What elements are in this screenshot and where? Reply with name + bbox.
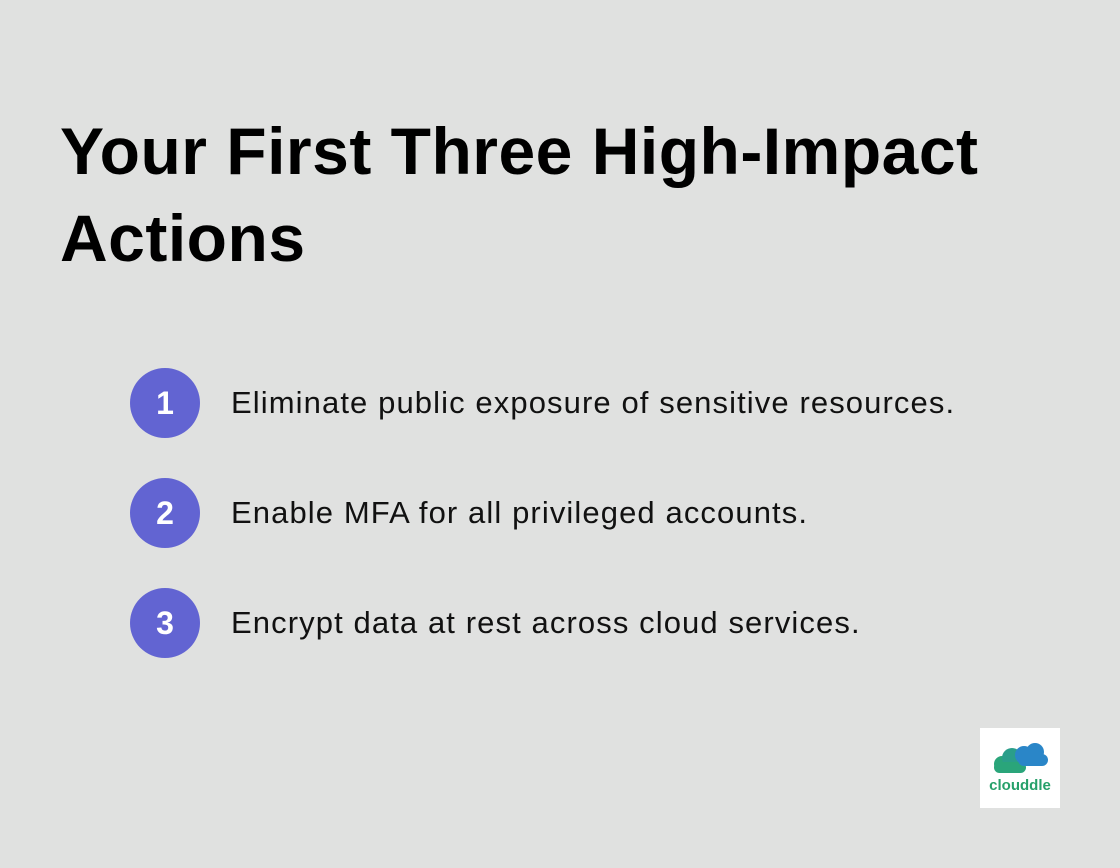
badge 3: 3 <box>156 605 174 641</box>
badge 1: 1 <box>156 385 174 421</box>
badge 2 <box>130 478 200 548</box>
logo: clouddle <box>980 728 1060 808</box>
step 3 <box>130 588 861 658</box>
badge 1 <box>130 368 200 438</box>
text 3: Encrypt data at rest across cloud services. <box>231 605 861 640</box>
text 2: Enable MFA for all privileged accounts. <box>231 495 808 530</box>
text 1: Eliminate public exposure of sensitive resources. <box>231 385 955 420</box>
title <box>60 114 979 275</box>
step 2 <box>130 478 808 548</box>
title: Actions <box>60 201 306 275</box>
logo: clouddle: clouddle <box>989 777 1051 794</box>
badge 3 <box>130 588 200 658</box>
badge 2: 2 <box>156 495 174 531</box>
step 1 <box>130 368 955 438</box>
title: Your First Three High-Impact <box>60 114 979 188</box>
